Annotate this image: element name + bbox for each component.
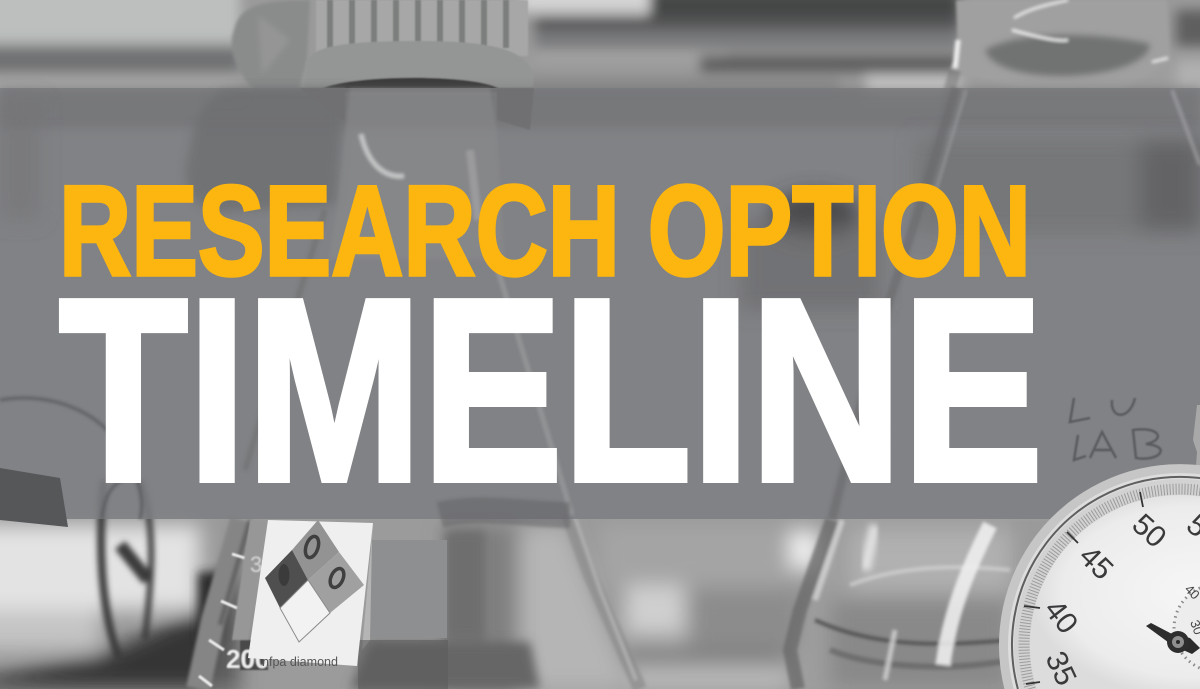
flask cap — [316, 0, 528, 90]
flask, right — [790, 0, 1200, 689]
hazard diamond label — [248, 520, 373, 669]
wires, lower left — [101, 480, 151, 660]
flask graduation marks: 3 — [250, 552, 262, 577]
flask neck showing through band — [347, 87, 494, 222]
gloved hand — [232, 0, 310, 97]
stopwatch hand — [1146, 623, 1200, 654]
blurred figure behind title — [10, 134, 1200, 312]
flask graduation marks — [199, 520, 269, 686]
cap skirt showing through band — [326, 88, 534, 130]
flask wall, right — [832, 88, 1200, 519]
stopwatch numerals: 40 — [1038, 594, 1084, 640]
grey paper tag on flask — [358, 523, 448, 689]
flask with cap, left — [198, 0, 640, 689]
stopwatch numerals — [1047, 513, 1200, 685]
wires through band — [0, 398, 142, 519]
stopwatch — [999, 405, 1200, 689]
stopwatch dial face — [1030, 495, 1200, 689]
stopwatch sub-dial — [1174, 582, 1200, 672]
translucent dark band behind title — [0, 88, 1200, 519]
handwritten lab note — [1070, 398, 1161, 460]
right flask glass wall — [943, 70, 960, 88]
stopwatch crown — [1193, 405, 1200, 468]
dark gap behind flask, lower left — [190, 564, 216, 630]
stopwatch tick ring — [1024, 489, 1200, 689]
flask body dark interior, lower centre — [350, 530, 540, 689]
hand showing through band — [186, 90, 345, 212]
flask graduation marks: 200 — [226, 644, 269, 674]
stopwatch numerals: 45 — [1072, 540, 1119, 587]
hazard diamond label: nfpa diamond — [262, 654, 338, 669]
stopwatch bezel — [999, 464, 1200, 689]
dark paper shape, left — [0, 468, 68, 527]
blurred background details inside band — [0, 88, 1200, 527]
flask wall, left — [245, 210, 572, 515]
stopwatch numerals: 50 — [1126, 508, 1172, 555]
